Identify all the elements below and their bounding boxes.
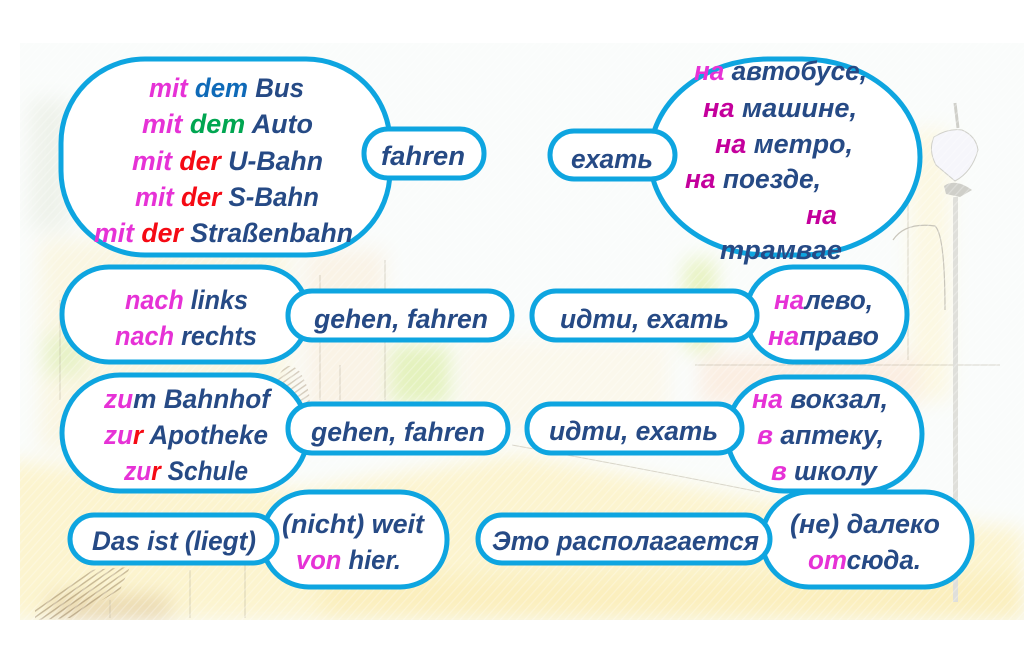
dark hatching, lower left bbox=[35, 567, 130, 620]
row 2 left: nach links / rechts bbox=[62, 267, 308, 362]
text: в аптеку: в аптеку, bbox=[757, 420, 884, 450]
row 4 right bubble: (не) далеко отсюда bbox=[762, 492, 972, 587]
text: направо: направо bbox=[768, 321, 879, 351]
text: налево: налево, bbox=[774, 285, 873, 315]
text: zur Schule: zur Schule bbox=[123, 456, 248, 486]
text: mit der U-Bahn: mit der U-Bahn bbox=[132, 146, 323, 176]
pill: Это располагается: Это располагается bbox=[492, 526, 759, 556]
pill: ехать: ехать bbox=[571, 144, 653, 174]
text: (nicht) weit: (nicht) weit bbox=[282, 509, 425, 539]
text: на вокзал: на вокзал, bbox=[752, 384, 888, 414]
text: в школу: в школу bbox=[771, 456, 879, 486]
pill: gehen, fahren (row 2): gehen, fahren bbox=[313, 304, 488, 334]
text: трамвае: трамвае bbox=[720, 235, 842, 265]
pill: Das ist (liegt): Das ist (liegt) bbox=[92, 526, 256, 556]
pill: Это располагается bbox=[478, 515, 770, 563]
arch hatching bbox=[278, 366, 310, 402]
row 1 right: Russian transport bbox=[650, 56, 920, 265]
text: zur Apotheke: zur Apotheke bbox=[103, 420, 268, 450]
text: zum Bahnhof: zum Bahnhof bbox=[103, 384, 273, 414]
text: von hier: von hier. bbox=[296, 545, 401, 575]
pill: gehen, fahren (row 2) bbox=[288, 291, 512, 340]
pill: ехать bbox=[550, 131, 675, 179]
text: mit der S-Bahn: mit der S-Bahn bbox=[135, 182, 319, 212]
pill: идти, ехать (row 3) bbox=[527, 404, 742, 453]
pill: идти, ехать (row 3): идти, ехать bbox=[549, 416, 718, 446]
text: на метро: на метро, bbox=[715, 129, 853, 159]
row 4 left bubble: (nicht) weit von hier bbox=[262, 492, 447, 587]
text: на автобусе: на автобусе, bbox=[694, 56, 867, 86]
text: на поезде: на поезде, bbox=[685, 164, 821, 194]
pill: идти, ехать (row 2) bbox=[532, 291, 757, 340]
row 3 left: zum / zur bbox=[62, 375, 308, 491]
background: pencil sketch of a street bbox=[20, 94, 1024, 620]
pill: gehen, fahren (row 3) bbox=[288, 404, 508, 453]
text: nach rechts: nach rechts bbox=[115, 321, 257, 351]
pill: идти, ехать (row 2): идти, ехать bbox=[560, 304, 729, 334]
text: mit dem Auto: mit dem Auto bbox=[142, 109, 313, 139]
pill: gehen, fahren (row 3): gehen, fahren bbox=[310, 417, 485, 447]
row 3 right: на вокзал / в аптеку / в школу bbox=[727, 377, 922, 491]
pill: Das ist (liegt) bbox=[70, 515, 277, 563]
street lines bbox=[60, 204, 1000, 618]
text: mit der Straßenbahn: mit der Straßenbahn bbox=[94, 218, 353, 248]
text: на машине: на машине, bbox=[703, 93, 857, 123]
street lamp bbox=[893, 103, 978, 602]
text: (не) далеко: (не) далеко bbox=[790, 509, 940, 539]
row 2 right: налево / направо bbox=[746, 267, 907, 362]
text: mit dem Bus: mit dem Bus bbox=[149, 73, 304, 103]
text: nach links: nach links bbox=[125, 285, 248, 315]
text: на: на bbox=[806, 200, 837, 230]
pill: fahren bbox=[364, 129, 484, 178]
row 1 left: mit + Dativ bbox=[61, 59, 390, 255]
text: отсюда: отсюда. bbox=[808, 545, 921, 575]
pill: fahren: fahren bbox=[381, 141, 465, 171]
